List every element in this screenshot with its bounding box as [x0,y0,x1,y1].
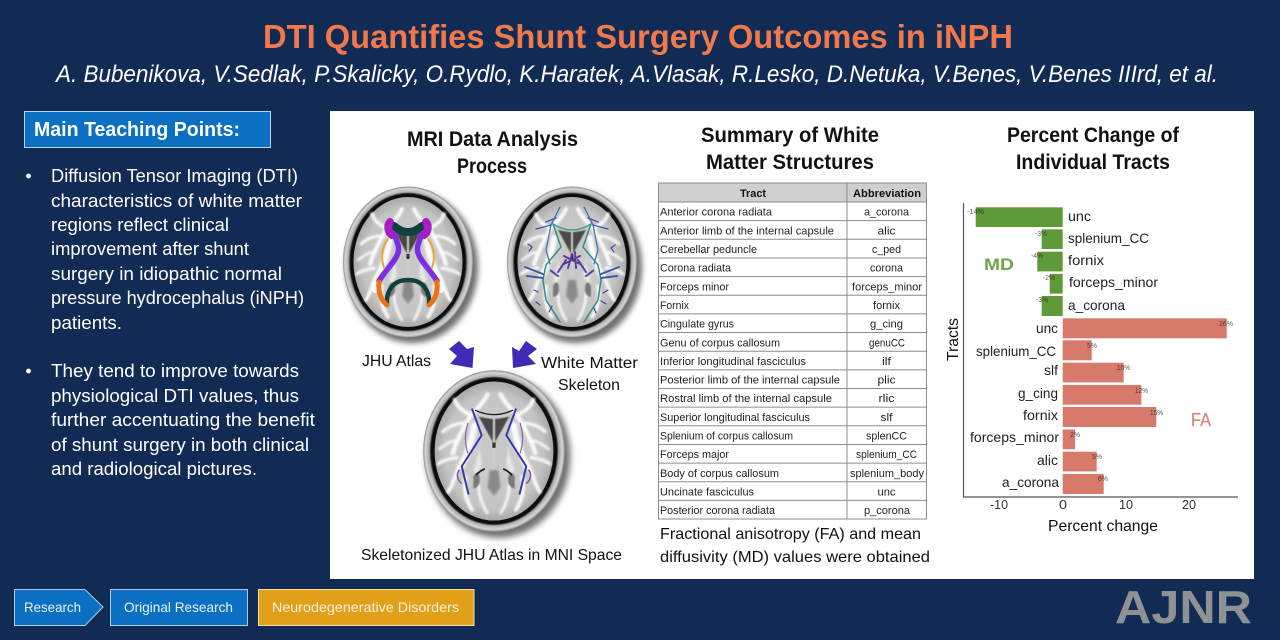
table: white matter tracts: Forceps major [660,449,729,461]
bar value labels: 2% [1070,432,1080,439]
bar value labels: 10% [1117,365,1130,372]
icon: skeletonized atlas brain [423,370,570,538]
x axis ticks: 20 [1182,497,1196,512]
FA tract labels: unc [1036,320,1058,336]
FA tract labels: slf [1044,362,1058,378]
table: white matter tracts: Anterior limb of the internal capsule [660,225,834,237]
heading: MRI data analysis process: MRI Data Analysis [407,128,578,151]
bar value labels [967,209,1233,483]
table: white matter tracts: Cingulate gyrus [660,319,734,331]
tag: original research: Original Research [124,599,233,615]
text block: teaching point 1: pressure hydrocephalus (iNPH) [51,288,304,308]
heading: MRI data analysis process: Process [457,155,527,178]
MD tract labels: a_corona [1068,297,1125,313]
FA tract labels: g_cing [1018,385,1058,401]
table: white matter tracts: Corona radiata [660,263,732,275]
icon: white matter skeleton brain [507,186,642,343]
table: white matter tracts: Posterior limb of the internal capsule [660,375,840,387]
x axis ticks: 10 [1119,497,1133,512]
arrow: skeleton to combined [512,341,537,368]
text block: teaching point 2: further accentuating the benefit [51,410,315,430]
FA tract labels: alic [1037,452,1058,468]
table: white matter tracts: slf [880,412,894,424]
table: white matter tracts: genuCC [869,337,905,349]
text block: teaching point 2: of shunt surgery in both clinical [51,435,309,455]
title: DTI Quantifies Shunt Surgery Outcomes in iNPH [263,18,1013,55]
table: white matter tracts: ilf [882,356,892,368]
FA tract labels: fornix [1023,407,1058,423]
text block: teaching point 2 [26,361,315,479]
chart axes [964,203,1238,497]
label: JHU atlas: JHU Atlas [362,353,431,370]
text block: teaching point 1: patients. [51,313,122,333]
table: white matter tracts: Splenium of corpus callosum [660,430,793,442]
label: white matter skeleton: White Matter [541,355,639,372]
table: white matter tracts: Forceps minor [660,281,729,293]
x axis ticks: -10 [990,497,1008,512]
logo: AJNR: AJNR [1115,581,1252,633]
text block: teaching point 1 [26,166,304,333]
heading: MRI data analysis process [407,128,578,178]
bar value labels: 26% [1219,321,1233,328]
bar value labels: -2% [1043,275,1055,282]
arrow: atlas to combined [449,341,474,368]
table: white matter tracts: Posterior corona radiata [660,505,776,517]
heading: percent change of individual tracts: Percent Change of [1007,124,1180,147]
tag: research: Research [24,599,81,615]
panel: white figure panel [330,111,1254,579]
text block: teaching point 1: improvement after shunt [51,239,249,259]
caption: FA and MD values: Fractional anisotropy (FA) and mean [660,526,921,543]
y axis title: Tracts [945,318,962,361]
table: white matter tracts: Cerebellar peduncle [660,244,757,256]
table: white matter tracts [658,183,927,519]
bar value labels: 5% [1087,343,1097,350]
bar value labels: 12% [1135,388,1148,395]
table: white matter tracts: p_corona [864,505,911,517]
table: white matter tracts: Anterior corona radiata [660,207,773,219]
bar value labels: -14% [967,209,984,216]
table: white matter tracts: a_corona [864,207,910,219]
heading: summary of white matter structures: Matter Structures [706,151,874,174]
text block: teaching point 1: characteristics of white matter [51,191,302,211]
table: white matter tracts: unc [878,486,896,498]
label: white matter skeleton [541,355,639,394]
text block: teaching point 1: regions reflect clinical [51,215,229,235]
heading: percent change of individual tracts: Individual Tracts [1016,151,1170,174]
heading: summary of white matter structures: Summary of White [701,124,879,147]
MD tract labels: unc [1068,208,1091,224]
table: white matter tracts: corona [870,263,904,275]
label: skeletonized atlas: Skeletonized JHU Atlas in MNI Space [361,547,622,564]
label: white matter skeleton: Skeleton [558,377,620,394]
FA tract labels [970,320,1059,490]
table: white matter tracts: Tract [740,188,766,200]
tag: neurodegenerative disorders [258,590,474,626]
table: white matter tracts: g_cing [870,319,903,331]
FA tract labels: forceps_minor [970,429,1059,445]
text block: teaching point 1: Diffusion Tensor Imaging (DTI) [51,166,298,186]
FA series label: FA [1191,410,1211,430]
MD series label: MD [984,255,1014,274]
authors: A. Bubenikova, V.Sedlak, P.Skalicky, O.Rydlo, K.Haratek, A.Vlasak, R.Lesko, D.Netuka, V.Benes, V.Benes IIIrd, et al. [54,61,1218,88]
FA tract labels: splenium_CC [976,343,1056,359]
table: white matter tracts: Rostral limb of the internal capsule [660,393,832,405]
heading: percent change of individual tracts [1007,124,1180,174]
MD tract labels [1068,208,1158,313]
table: white matter tracts: rlic [878,393,895,405]
heading: main teaching points: Main Teaching Points: [34,119,240,141]
table: white matter tracts: alic [878,225,896,237]
bar value labels: 5% [1092,454,1102,461]
x axis title: Percent change [1048,518,1158,535]
MD bars [976,207,1063,316]
bar value labels: 6% [1098,476,1108,483]
FA tract labels: a_corona [1002,474,1059,490]
table: white matter tracts: c_ped [872,244,901,256]
bar value labels: -3% [1036,297,1048,304]
text block: teaching point 2: They tend to improve towards [51,361,299,381]
MD tract labels: forceps_minor [1069,274,1158,290]
bar chart: percent change [945,203,1238,535]
text block: teaching point 2: physiological DTI values, thus [51,386,299,406]
text block: teaching point 1: surgery in idiopathic normal [51,264,282,284]
table: white matter tracts: forceps_minor [852,281,922,293]
icon: JHU atlas brain [343,186,478,343]
table: white matter tracts: Fornix [660,300,689,312]
table: white matter tracts: splenium_body [850,468,924,480]
x axis ticks [990,497,1196,512]
caption: FA and MD values: diffusivity (MD) values were obtained [660,549,930,566]
caption: FA and MD values [660,526,930,566]
heading: summary of white matter structures [701,124,879,174]
table: white matter tracts: splenCC [866,430,907,442]
x axis ticks: 0 [1059,497,1067,512]
MD tract labels: fornix [1068,252,1104,268]
MD tract labels: splenium_CC [1068,230,1149,246]
tag: neurodegenerative disorders: Neurodegenerative Disorders [272,599,459,615]
table: white matter tracts: Inferior longitudinal fasciculus [660,356,806,368]
table: white matter tracts: Uncinate fasciculus [660,486,754,498]
heading: main teaching points [24,112,270,148]
bar value labels: -4% [1031,253,1043,260]
table: white matter tracts: fornix [873,300,900,312]
table: white matter tracts: splenium_CC [856,449,917,461]
text block: teaching point 2: and radiological pictures. [51,459,257,479]
bar value labels: -3% [1035,231,1047,238]
tag: research [14,590,103,626]
table: white matter tracts: Superior longitudinal fasciculus [660,412,810,424]
table: white matter tracts: Body of corpus callosum [660,468,779,480]
table: white matter tracts: plic [878,375,896,387]
bar value labels: 15% [1150,410,1163,417]
FA bars [1063,318,1227,494]
table: white matter tracts: Abbreviation [853,188,921,200]
tag: original research [110,590,248,626]
table: white matter tracts: Genu of corpus callosum [660,337,780,349]
